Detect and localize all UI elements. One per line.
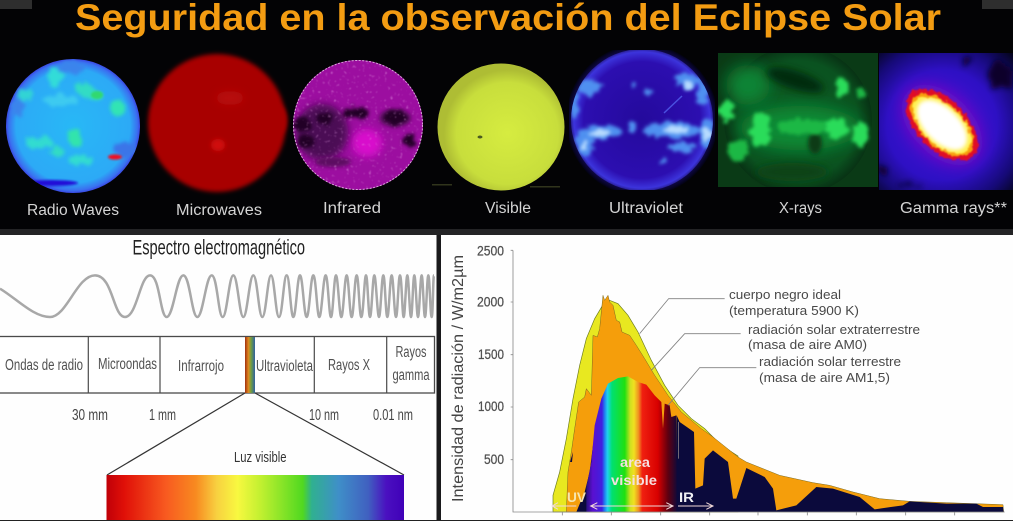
sun: x-rays bbox=[718, 46, 878, 194]
spectrum band table: Infrarrojo bbox=[178, 358, 224, 375]
y axis tick labels: 1000 bbox=[478, 399, 504, 414]
y axis tick labels: 2500 bbox=[477, 244, 504, 258]
curve: extraterrestrial radiation bbox=[566, 295, 1004, 512]
wavelength scale labels bbox=[72, 407, 413, 424]
vertical divider bbox=[436, 235, 441, 521]
panel: solar radiation chart bbox=[441, 235, 1013, 520]
top right corner patch bbox=[982, 0, 1013, 9]
visible spectrum bar bbox=[106, 475, 404, 520]
y axis tick labels: 500 bbox=[484, 452, 504, 467]
wavelength scale labels: 1 mm bbox=[149, 407, 176, 424]
chart region labels: visible bbox=[611, 472, 657, 488]
wavelength scale labels: 0.01 nm bbox=[373, 407, 413, 424]
wavelength captions: Infrared bbox=[323, 200, 381, 217]
range arrows bbox=[552, 503, 713, 509]
visible band slice bbox=[245, 337, 255, 393]
spectrum band table: gamma bbox=[392, 367, 430, 384]
chirp wave bbox=[0, 275, 434, 317]
top left corner patch bbox=[0, 0, 32, 9]
spectrum band table: Microondas bbox=[98, 356, 157, 373]
wavelength scale labels: 10 nm bbox=[309, 407, 339, 424]
spectrum band table: Ondas de radio bbox=[5, 357, 83, 374]
spectrum band table: Rayos bbox=[396, 344, 427, 361]
wavelength captions: Ultraviolet bbox=[609, 200, 684, 217]
curve labels: (masa de aire AM0) bbox=[748, 337, 867, 352]
label: luz visible: Luz visible bbox=[234, 449, 286, 466]
terrestrial infrared bands bbox=[677, 415, 1004, 512]
panel: electromagnetic spectrum bbox=[0, 235, 436, 520]
sun: radio waves bbox=[6, 59, 140, 193]
spectrum band table: Rayos X bbox=[328, 357, 370, 374]
separator strip bbox=[0, 229, 1013, 235]
wavelength captions: Gamma rays** bbox=[900, 200, 1007, 217]
bottom edge bbox=[0, 520, 1013, 521]
y axis title: Intensidad de radiación / W/m2µm bbox=[450, 255, 467, 502]
radiation curves bbox=[511, 250, 1005, 515]
wavelength captions: Radio Waves bbox=[27, 202, 119, 219]
y axis tick labels bbox=[477, 244, 504, 467]
curve: ideal black body bbox=[553, 300, 738, 512]
curve labels: (temperatura 5900 K) bbox=[729, 303, 859, 318]
wavelength captions: X-rays bbox=[779, 200, 822, 217]
curve: terrestrial radiation bbox=[586, 376, 678, 512]
small dark wedge bbox=[570, 452, 573, 462]
terrestrial shadow at left bbox=[576, 445, 598, 512]
axes bbox=[511, 250, 1005, 515]
sun: microwaves bbox=[148, 54, 287, 192]
spectrum band table: Ultravioleta bbox=[256, 358, 313, 375]
wavelength captions: Microwaves bbox=[176, 202, 262, 219]
wavelength captions: Visible bbox=[485, 200, 531, 217]
chart region labels: area bbox=[620, 454, 650, 470]
wavelength captions bbox=[27, 200, 1007, 219]
curve labels: radiación solar extraterrestre bbox=[748, 322, 920, 337]
curve labels: (masa de aire AM1,5) bbox=[759, 370, 890, 385]
chart region labels bbox=[567, 454, 694, 505]
heading: espectro electromagnético: Espectro electromagnético bbox=[132, 236, 305, 260]
sun: visible bbox=[432, 64, 564, 190]
chart region labels: IR bbox=[679, 489, 694, 505]
spectrum band table bbox=[0, 336, 434, 393]
curve labels: radiación solar terrestre bbox=[759, 354, 901, 369]
curve labels bbox=[729, 287, 920, 385]
curve labels: cuerpo negro ideal bbox=[729, 287, 841, 302]
sun: ultraviolet bbox=[569, 50, 715, 190]
y axis tick labels: 1500 bbox=[478, 347, 504, 362]
wavelength scale labels: 30 mm bbox=[72, 407, 108, 424]
gap in infrared band bbox=[678, 422, 679, 459]
y axis tick labels: 2000 bbox=[477, 294, 504, 310]
panel: solar images by wavelength bbox=[6, 44, 1013, 219]
sun: gamma rays bbox=[874, 53, 1013, 190]
zoom lines to visible light bbox=[107, 393, 404, 475]
chart region labels: UV bbox=[567, 489, 587, 505]
leader lines bbox=[640, 299, 756, 405]
sun: infrared bbox=[293, 60, 423, 190]
